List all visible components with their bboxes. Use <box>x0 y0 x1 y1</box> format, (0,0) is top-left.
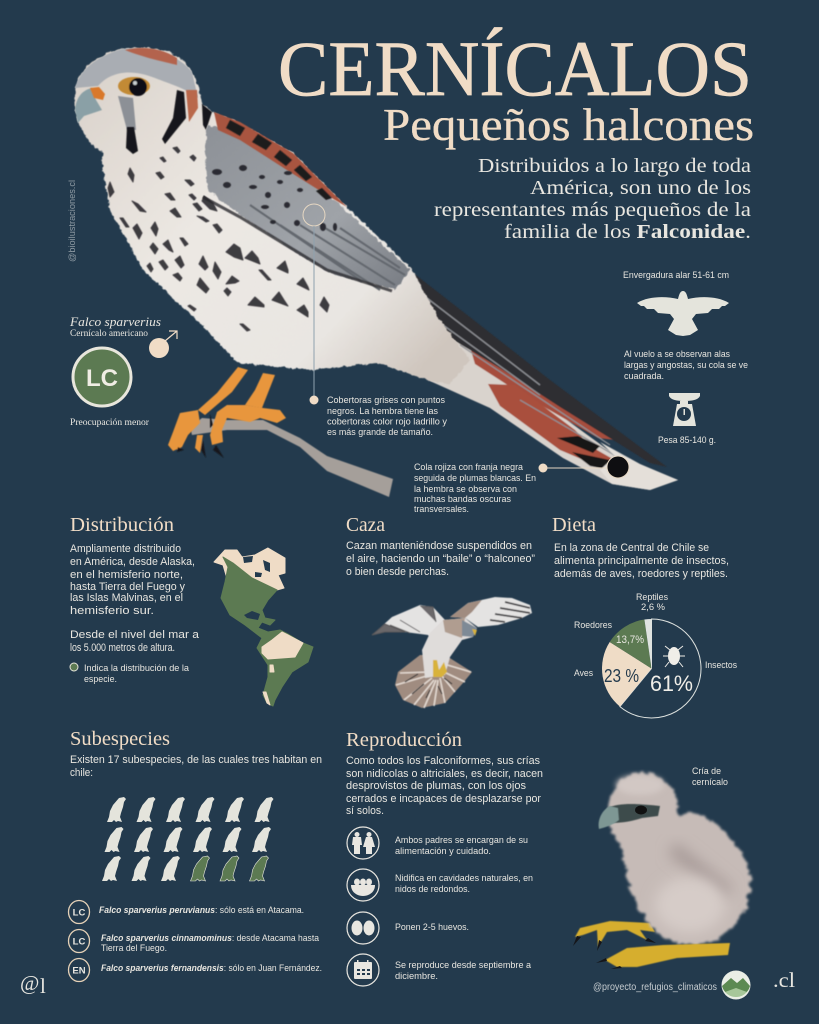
chick upper foot <box>575 921 655 947</box>
illustration: American kestrel perched on a branch <box>74 48 678 497</box>
icon: nest <box>347 869 379 901</box>
eye <box>118 77 150 96</box>
text: distribution description: Ampliamente distribuido <box>70 543 181 555</box>
pie labels: Aves <box>574 668 593 679</box>
intro text: familia de los Falconidae . <box>504 222 751 243</box>
status caption: Preocupación menor <box>70 418 150 428</box>
branch <box>190 418 393 497</box>
text: diet description: alimenta principalmente de insectos, <box>554 555 729 567</box>
text: distribution description: Desde el nivel del mar a <box>70 629 200 641</box>
text: nesting: nidos de redondos. <box>395 884 470 895</box>
icon: calendar <box>347 954 379 986</box>
callout text: tail <box>414 462 536 515</box>
nape rust <box>186 90 198 122</box>
heading: Caza: Caza <box>346 514 385 536</box>
pie labels: Insectos <box>705 660 737 671</box>
black face stripes <box>126 90 212 154</box>
footer: project handle: @proyecto_refugios_climaticos <box>593 982 717 993</box>
breast spots <box>108 147 329 331</box>
pie labels: Reptiles <box>636 592 668 603</box>
caption: chick: cernícalo <box>692 777 728 787</box>
caption: chick <box>692 766 728 787</box>
species name <box>69 314 161 338</box>
body <box>422 618 477 678</box>
subtitle: Pequeños halcones <box>383 100 754 150</box>
legend: distribution key <box>70 663 190 685</box>
mantle rust bars <box>214 112 347 207</box>
text: reproduction description: sí solos. <box>346 805 384 817</box>
title: CERNÍCALOS <box>278 25 752 112</box>
tail fan <box>395 655 472 708</box>
flight description: cuadrada. <box>624 371 664 382</box>
heading: Dieta: Dieta <box>552 514 596 536</box>
text: distribution description: las Islas Malvinas, en el <box>70 592 183 604</box>
badge: conservation status LC <box>73 348 131 406</box>
beak <box>75 88 102 123</box>
subspecies: fernandensis: EN <box>72 966 86 976</box>
text: nesting: Nidifica en cavidades naturales, en <box>395 873 533 884</box>
text: parents care: alimentación y cuidado. <box>395 846 491 857</box>
text: eggs: Ponen 2-5 huevos. <box>395 922 469 933</box>
text: distribution description <box>70 543 200 654</box>
body and head <box>74 48 470 384</box>
callout text: tail: muchas bandas oscuras <box>414 494 511 505</box>
text: hunting description: Cazan manteniéndose suspendidos en <box>346 540 532 552</box>
panel: diet <box>552 514 737 718</box>
panel: hunting <box>346 514 535 708</box>
cere <box>90 87 105 100</box>
subspecies: peruvianus: Falco sparverius peruvianus: sólo está en Atacama. <box>99 905 304 916</box>
text: subspecies intro: chile: <box>70 767 93 779</box>
heading: Reproducción: Reproducción <box>346 729 462 751</box>
wing feather lines and spots <box>203 165 405 291</box>
callout text: tail: Cola rojiza con franja negra <box>414 462 524 473</box>
footer: left handle fragment: l <box>40 974 46 998</box>
icon: insect <box>663 646 685 667</box>
logo: refugios climaticos <box>722 970 750 1000</box>
map: the Americas <box>214 548 313 706</box>
callout text: tail: la hembra se observa con <box>414 484 517 495</box>
text: reproduction description: son nidícolas o altriciales, es decir, nacen <box>346 768 543 780</box>
text: distribution description: hemisferio sur. <box>70 605 154 617</box>
intro text: América, son uno de los <box>530 178 751 199</box>
species name: Falco sparverius <box>69 314 161 329</box>
text: nesting <box>395 873 533 895</box>
text: hunting description: o bien desde perchas. <box>346 566 449 578</box>
subspecies: peruvianus: LC <box>73 908 85 918</box>
icon: parents <box>347 827 379 859</box>
chick face mask <box>608 804 660 823</box>
icon: flying bird silhouette <box>637 291 729 336</box>
chick body <box>609 773 750 945</box>
callout text: tail: transversales. <box>414 504 469 515</box>
intro text: Distribuidos a lo largo de toda <box>478 156 751 177</box>
credit: illustrator handle: @bioilustraciones.cl <box>67 180 77 262</box>
text: subspecies intro: Existen 17 subespecies, de las cuales tres habitan en <box>70 754 322 766</box>
pie chart: 61% <box>650 671 693 696</box>
heading: Distribución: Distribución <box>70 514 174 536</box>
panel: reproduction <box>346 729 543 986</box>
subspecies: cinnamominus: Falco sparverius cinnamominus: desde Atacama hasta <box>101 933 320 944</box>
subspecies: peruvianus <box>68 900 304 924</box>
callout text: coverts: Cobertoras grises con puntos <box>327 395 445 406</box>
text: diet description: En la zona de Central de Chile se <box>554 542 709 554</box>
text: diet description <box>554 542 729 580</box>
pie chart: 23 % <box>604 666 639 686</box>
subspecies: fernandensis: Falco sparverius fernandensis: sólo en Juan Fernández. <box>101 963 322 974</box>
text: season: diciembre. <box>395 971 438 982</box>
text: season <box>395 960 532 982</box>
callout: tail pointer <box>538 456 629 478</box>
illustration: hovering kestrel <box>372 597 532 708</box>
wing coverts <box>206 125 410 290</box>
text: reproduction description: Como todos los Falconiformes, sus crías <box>346 755 540 767</box>
subspecies: cinnamominus: Tierra del Fuego. <box>101 943 167 954</box>
text: hunting description <box>346 540 535 578</box>
text: hunting description: el aire, haciendo un “baile” o “halconeo” <box>346 553 535 565</box>
chick lower foot <box>605 943 730 967</box>
text: parents care: Ambos padres se encargan de su <box>395 835 528 846</box>
flight description <box>624 349 748 382</box>
weight caption: Pesa 85-140 g. <box>658 435 716 446</box>
pie labels <box>574 592 737 679</box>
callout text: coverts: es más grande de tamaño. <box>327 427 433 438</box>
legend: distribution key: Indica la distribución de la <box>84 663 190 674</box>
icon: eggs <box>347 912 379 944</box>
pictogram: 17 subspecies birds <box>102 797 274 881</box>
pie labels: 2,6 % <box>641 602 666 613</box>
footer: left handle fragment <box>20 971 46 998</box>
chick beak <box>599 806 619 829</box>
right wing <box>450 597 532 627</box>
text: reproduction description: desprovistos de plumas, con los ojos <box>346 780 526 792</box>
tail <box>380 272 678 490</box>
text: distribution description: en el hemisferio norte, <box>70 569 183 581</box>
panel: distribution <box>70 514 313 706</box>
heading: Subespecies: Subespecies <box>70 728 170 750</box>
wingspan caption: Envergadura alar 51-61 cm <box>623 270 729 281</box>
text: distribution description: los 5.000 metros de altura. <box>70 642 175 654</box>
callout text: coverts <box>327 395 447 438</box>
text: distribution description: en América, desde Alaska, <box>70 556 195 568</box>
text: reproduction description: cerrados e incapaces de desplazarse por <box>346 793 541 805</box>
text: distribution description: hasta Tierra del Fuego y <box>70 581 185 593</box>
subspecies: cinnamominus: LC <box>73 936 85 948</box>
illustration: kestrel chick <box>573 773 750 969</box>
text: reproduction description <box>346 755 543 817</box>
callout: wing coverts pointer <box>303 204 325 404</box>
caption: chick: Cría de <box>692 766 721 776</box>
icon: weighing scale <box>669 393 700 426</box>
chick eye <box>635 806 647 814</box>
subspecies: fernandensis <box>68 958 322 982</box>
legs and feet <box>168 367 286 458</box>
pie labels: Roedores <box>574 620 612 631</box>
subspecies: cinnamominus <box>68 930 320 954</box>
left wing <box>372 605 445 642</box>
crown patch <box>125 48 177 65</box>
intro text <box>434 156 751 243</box>
text: diet description: además de aves, roedores y reptiles. <box>554 568 728 580</box>
callout text: coverts: cobertoras color rojo ladrillo y <box>327 416 447 428</box>
species name: Cernícalo americano <box>70 328 149 338</box>
text: subspecies intro <box>70 754 322 779</box>
text: parents care <box>395 835 528 857</box>
icon: male symbol <box>149 331 177 358</box>
text: season: Se reproduce desde septiembre a <box>395 960 532 971</box>
panel: subspecies <box>68 728 322 982</box>
callout text: coverts: negros. La hembra tiene las <box>327 406 438 417</box>
footer: domain: .cl <box>773 968 795 992</box>
pie chart: 13,7% <box>616 634 644 646</box>
legend: distribution key: especie. <box>84 674 117 685</box>
gray cheek stripe <box>118 96 136 130</box>
footer: left handle fragment: @ <box>20 971 39 995</box>
badge: conservation status LC: LC <box>86 365 118 392</box>
pie chart <box>602 619 701 718</box>
flight description: Al vuelo a se observan alas <box>624 349 730 360</box>
callout text: tail: seguida de plumas blancas. En <box>414 473 536 484</box>
flight description: largas y angostas, su cola se ve <box>624 360 748 371</box>
intro text: representantes más pequeños de la <box>434 200 751 221</box>
chick talons <box>573 936 656 969</box>
head cap <box>75 48 198 98</box>
